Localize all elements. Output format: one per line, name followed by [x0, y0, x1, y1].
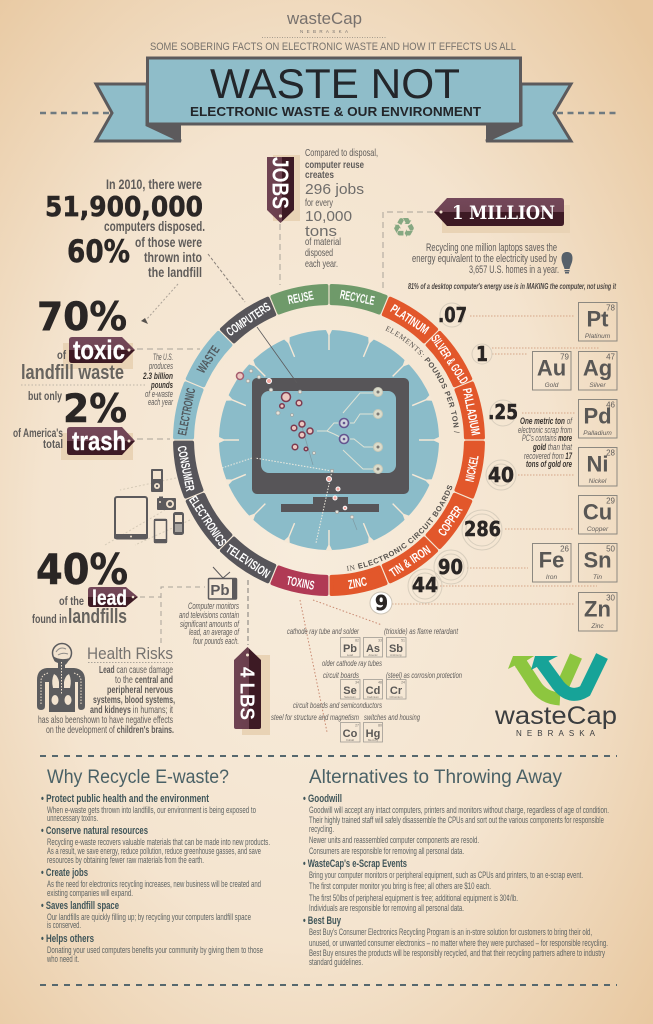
- segment: platinum: PLATINUM: [388, 302, 431, 337]
- logo: wasteCap Nebraska: [494, 656, 617, 738]
- element: gold: 79: [560, 352, 570, 362]
- subtitle: ELECTRONIC WASTE & OUR ENVIRONMENT: [190, 104, 481, 119]
- text: health risks: Lead can cause damage: [99, 664, 173, 676]
- segment: consumer: [173, 439, 202, 497]
- panel: alternatives to throwing away: Consumers are responsible for removing all personal data.: [309, 846, 464, 856]
- header: wasteCap logo and tagline: wasteCap: [286, 9, 362, 28]
- segment: electronic: [173, 383, 202, 441]
- small element boxes: toxins: 80: [378, 724, 382, 728]
- stat: 70% toxic landfill waste: 70%: [37, 295, 127, 340]
- stat: 70% toxic landfill waste: of: [57, 348, 67, 362]
- text: jobs created: tons: [305, 223, 337, 240]
- tag: 4 LBS: [234, 647, 270, 735]
- stat: 51,900,000 computers: In 2010, there were: [106, 177, 202, 192]
- text: jobs created: of material: [305, 236, 341, 248]
- text: monitors contain lead: [179, 601, 240, 647]
- element: silver: Ag: [583, 356, 612, 380]
- ring of labelled segments: [173, 284, 485, 596]
- segment: waste: [186, 332, 232, 388]
- text: recycling one million laptops: Recycling one million laptops saves the: [426, 242, 557, 254]
- element: tin: [578, 544, 617, 582]
- segment: zinc: [328, 567, 386, 596]
- segment: silver and gold: SILVER & GOLD: [428, 332, 471, 387]
- small element boxes: toxins: Chromium: [390, 695, 403, 699]
- callout: one metric ton: One metric ton of: [520, 416, 573, 427]
- segment: waste: WASTE: [194, 343, 223, 376]
- text: jobs created: Compared to disposal,: [305, 147, 378, 159]
- stat: 51,900,000 computers: 51,900,000: [45, 190, 203, 223]
- callout: one metric ton: PC's contains more: [522, 433, 572, 444]
- text: jobs created: 10,000: [305, 208, 352, 225]
- small element boxes: toxins: 24: [401, 680, 405, 684]
- small element boxes: toxins: 33: [378, 638, 382, 642]
- stat: 2% trash: of America's: [13, 426, 63, 440]
- note: 2.3 billion pounds: of e-waste: [145, 389, 173, 399]
- panel: why recycle e-waste: resources by obtaining fewer raw materials from the earth.: [47, 855, 204, 865]
- stat: 51,900,000 computers: the landfill: [148, 265, 202, 280]
- panel: why recycle e-waste: • Saves landfill space: [41, 900, 119, 912]
- text: monitors contain lead: significant amounts of: [180, 619, 240, 630]
- segment: copper: [426, 492, 472, 548]
- stat: 2% trash: 2%: [63, 387, 127, 432]
- panel: alternatives to throwing away: Newer units and reassembled computer components are resold.: [309, 835, 479, 845]
- text: jobs created: disposed: [305, 247, 333, 259]
- panel: why recycle e-waste: • Create jobs: [41, 867, 88, 879]
- element: iron: Iron: [546, 574, 557, 581]
- segment: television: TELEVISION: [223, 542, 273, 581]
- element: palladium: 46: [606, 400, 616, 410]
- segment: recycle: RECYCLE: [339, 288, 376, 308]
- circuit lines: [317, 393, 374, 469]
- header: wasteCap logo and tagline: [150, 9, 516, 53]
- element: copper: Cu: [583, 500, 612, 524]
- dotted and thin lines: [222, 327, 357, 543]
- text: jobs created: each year.: [305, 258, 338, 270]
- element: gold: [532, 352, 571, 390]
- element: nickel: Ni: [586, 452, 608, 476]
- pounds per ton numbers: 40: [488, 463, 514, 487]
- center graphic: monitor on gear: [218, 327, 440, 551]
- pounds per ton numbers: .07: [438, 303, 467, 327]
- segment: television: [221, 537, 277, 583]
- segment: tin and iron: [381, 537, 437, 583]
- toxin usage labels: switches and housing: [364, 712, 420, 722]
- stat: 2% trash: total: [43, 437, 63, 451]
- title text: WASTE NOT: [210, 60, 460, 107]
- element: palladium: Palladium: [583, 430, 612, 437]
- note: 2.3 billion pounds: 2.3 billion: [142, 371, 173, 381]
- small element boxes: toxins: [340, 638, 406, 742]
- segment: reuse: [272, 284, 330, 313]
- note: 2.3 billion pounds: pounds: [150, 380, 173, 390]
- small element boxes: toxins: Cr: [390, 685, 403, 697]
- panel: why recycle e-waste: existing companies will expand.: [47, 888, 133, 898]
- element: palladium: Pd: [583, 404, 612, 428]
- icon: TV with Pb: [208, 567, 237, 599]
- segment: consumer: CONSUMER: [174, 445, 197, 492]
- callout: one metric ton: recovered from 17: [524, 451, 572, 462]
- stat: 51,900,000 computers: thrown into: [144, 250, 202, 265]
- element: copper: [578, 496, 617, 534]
- stat: 70% toxic landfill waste: landfill waste: [21, 362, 124, 384]
- icon: light bulb: [562, 252, 572, 274]
- element: platinum: 78: [606, 304, 616, 312]
- text: recycling one million laptops: energy equivalent to the electricity used by: [412, 253, 557, 265]
- segment: toxins: TOXINS: [285, 574, 316, 593]
- element: nickel: 28: [606, 448, 616, 458]
- logo: wasteCap Nebraska: NEBRASKA: [516, 729, 596, 738]
- text: jobs created: 296 jobs: [305, 181, 364, 198]
- text: monitors contain lead: and televisions contain: [179, 610, 239, 621]
- logo: wasteCap Nebraska: wasteCap: [494, 702, 617, 730]
- element: nickel: Nickel: [589, 478, 607, 485]
- small element boxes: toxins: Se: [343, 685, 357, 697]
- panel: alternatives to throwing away: The first computer monitor you bring is free; all others are $10 each.: [309, 881, 491, 891]
- element: copper: Copper: [587, 526, 609, 533]
- curved label: elements pounds per ton: ELEMENTS: POUNDS PER TON /: [385, 326, 460, 433]
- pounds per ton numbers: .25: [488, 400, 518, 424]
- small element boxes: toxins: Selenium: [344, 695, 356, 699]
- tag: 4 LBS: 4 LBS: [236, 667, 258, 720]
- toxin usage labels: cathode ray tube and solder: [287, 626, 360, 636]
- element: gold: Gold: [545, 382, 559, 389]
- icon: smartphone: [154, 519, 167, 543]
- panel: why recycle e-waste: • Protect public health and the environment: [41, 793, 209, 805]
- stat: 70% toxic landfill waste: [21, 295, 135, 384]
- panel: alternatives to throwing away: Individuals are responsible for removing all personal data.: [309, 903, 464, 913]
- element: platinum: Pt: [586, 306, 609, 332]
- segment: nickel: [456, 439, 485, 497]
- note: 2.3 billion pounds: produces: [148, 361, 173, 371]
- small element boxes: toxins: 51: [401, 638, 405, 642]
- small element boxes: toxins: Arsenic: [368, 653, 378, 657]
- panel: why recycle e-waste: • Helps others: [41, 933, 94, 945]
- element: zinc: [578, 592, 617, 631]
- element: gold: Au: [537, 356, 566, 380]
- small element boxes: toxins: Cobalt: [346, 738, 354, 742]
- element: zinc: 30: [606, 594, 616, 602]
- text: recycling one million laptops: 3,657 U.S. homes in a year.: [469, 264, 559, 276]
- stat: 2% trash: but only: [28, 389, 62, 403]
- segment: zinc: ZINC: [347, 574, 368, 592]
- panel: why recycle e-waste: is conserved.: [47, 920, 81, 930]
- small element boxes: toxins: 82: [355, 638, 359, 642]
- panel: alternatives to throwing away: • Best Buy: [303, 915, 342, 927]
- panel: why recycle e-waste: As a result, we save energy, reduce pollution, reduce greenhouse gasses, and save: [47, 846, 261, 856]
- small element boxes: toxins: Pb: [343, 643, 357, 655]
- header: wasteCap logo and tagline: NEBRASKA: [300, 29, 348, 34]
- callout: one metric ton: gold than that: [532, 442, 572, 453]
- segment: computers: [221, 297, 277, 343]
- pounds per ton numbers: 9: [375, 591, 388, 615]
- element: zinc: Zn: [584, 596, 611, 622]
- text: health risks: has also beenshown to have negative effects: [38, 714, 173, 726]
- small element boxes: toxins: Sb: [389, 643, 403, 655]
- note: 2.3 billion pounds: each year: [148, 397, 174, 407]
- segment: tin and iron: TIN & IRON: [387, 543, 433, 580]
- stat: 40% lead: of the: [59, 596, 84, 608]
- element: platinum: Platinum: [585, 333, 611, 340]
- segment: computers: COMPUTERS: [224, 300, 273, 339]
- icon: TV with Pb: Pb: [210, 582, 230, 599]
- element: iron: 26: [560, 544, 570, 554]
- text: health risks: Health Risks: [87, 644, 173, 663]
- toxin usage labels: circuit boards: [323, 670, 360, 680]
- pink data nodes: [236, 372, 313, 451]
- small element boxes: toxins: Co: [343, 728, 358, 740]
- panel: alternatives to throwing away: • WasteCap's e-Scrap Events: [303, 858, 407, 870]
- pounds per ton numbers: 1: [476, 342, 488, 366]
- panel: why recycle e-waste: As the need for electronics recycling increases, new business will be created and: [47, 879, 261, 889]
- panel: alternatives to throwing away: The first 50lbs of peripheral equipment is free; additional equipment is 30¢/lb.: [309, 893, 518, 903]
- element: zinc: Zinc: [590, 623, 604, 630]
- icon: recycle: ♻: [392, 213, 416, 244]
- stat: 2% trash: [13, 387, 135, 460]
- small element boxes: toxins: 27: [355, 724, 359, 728]
- pounds per ton numbers: 90: [438, 555, 463, 579]
- icon: camera: [157, 496, 176, 510]
- toxin usage labels: circuit boards and semiconductors: [293, 700, 383, 710]
- number rings: [408, 303, 516, 603]
- element: tin: 50: [606, 544, 616, 554]
- toxin usage labels: (steel) as corrosion protection: [386, 670, 462, 680]
- segment: electronic: ELECTRONIC: [175, 387, 198, 437]
- stat: 40% lead: found in: [32, 614, 67, 626]
- element: iron: [532, 544, 571, 582]
- segment: nickel: NICKEL: [463, 454, 482, 483]
- panel: why recycle e-waste: • Conserve natural resources: [41, 825, 148, 837]
- connector lines: [21, 212, 433, 732]
- panel: why recycle e-waste: who need it.: [46, 954, 79, 964]
- stat: 40% lead: landfills: [68, 606, 127, 628]
- stat: 51,900,000 computers: computers disposed.: [104, 219, 205, 234]
- callout: one metric ton: electronic scrap from: [518, 425, 572, 436]
- panel: alternatives to throwing away: recycling.: [309, 824, 334, 834]
- segment: palladium: PALLADIUM: [460, 387, 483, 437]
- text: monitors contain lead: lead, an average of: [189, 627, 240, 638]
- heading: Why Recycle E-waste?: [47, 767, 229, 788]
- circuit nodes: [374, 388, 382, 474]
- text: jobs created: creates: [305, 169, 334, 181]
- logo mark: [508, 656, 602, 699]
- stat: 40% lead: 40%: [36, 545, 128, 594]
- note: 2.3 billion pounds: The U.S.: [153, 352, 173, 362]
- element: tin: Sn: [583, 548, 612, 572]
- section dividers: [40, 756, 617, 985]
- segment: copper: COPPER: [435, 504, 465, 539]
- stat: 51,900,000 computers: of those were: [135, 235, 202, 250]
- heading: Alternatives to Throwing Away: [309, 767, 562, 788]
- text: jobs created: computer reuse: [305, 159, 364, 171]
- small element boxes: toxins: 48: [378, 680, 382, 684]
- panel: alternatives to throwing away: standard guidelines.: [309, 957, 363, 967]
- toxin usage labels: (trioxide) as flame retardant: [384, 626, 458, 636]
- note: 2.3 billion pounds: [142, 352, 174, 407]
- callout: one metric ton: tons of gold ore: [526, 459, 572, 470]
- panel: why recycle e-waste: Our landfills are quickly filling up; by recycling your computers landfill space: [47, 912, 251, 922]
- pounds per ton numbers: 286: [464, 517, 501, 541]
- panel: why recycle e-waste: Recycling e-waste recovers valuable materials that can be made into new products.: [47, 837, 270, 847]
- small element boxes: toxins: Mercury: [368, 738, 379, 742]
- tag: trash: trash: [72, 426, 126, 456]
- small element boxes: toxins: 34: [355, 680, 359, 684]
- segment: electronics: [185, 491, 233, 549]
- header: wasteCap logo and tagline: SOME SOBERING FACTS ON ELECTRONIC WASTE AND HOW IT EFFECTS US ALL: [150, 41, 516, 53]
- text: jobs created: for every: [305, 197, 334, 209]
- pounds per ton numbers: 44: [412, 573, 438, 597]
- small element boxes: toxins: As: [366, 643, 380, 655]
- element: copper: 29: [606, 496, 616, 506]
- text: monitors contain lead: Computer monitors: [188, 601, 239, 612]
- panel: why recycle e-waste: When e-waste gets thrown into landfills, our environment is being exposed to: [47, 805, 256, 815]
- panel: alternatives to throwing away: [303, 767, 609, 967]
- text: recycling one million laptops: [408, 242, 617, 291]
- tag: 1 MILLION: [434, 198, 570, 233]
- panel: why recycle e-waste: Donating your used computers benefits your community by giving them to those: [47, 945, 263, 955]
- panel: why recycle e-waste: unnecessary toxins.: [47, 813, 98, 823]
- element: silver: 47: [606, 352, 616, 362]
- panel: why recycle e-waste: [41, 767, 270, 964]
- tag: JOBS: JOBS: [268, 157, 294, 209]
- callout: one metric ton: [518, 416, 573, 470]
- small element boxes: toxins: Cd: [366, 685, 380, 697]
- icons: consumer electronics: [114, 469, 184, 543]
- text: health risks: [38, 644, 175, 736]
- icon: tablet: [114, 497, 148, 539]
- toxin usage labels: older cathode ray tubes: [322, 658, 383, 668]
- small element boxes: toxins: Lead: [347, 653, 354, 657]
- segment: toxins: [272, 567, 330, 596]
- element: platinum: [578, 302, 617, 341]
- tag: 1 MILLION: 1 MILLION: [452, 202, 555, 224]
- small element boxes: toxins: Hg: [366, 728, 380, 740]
- stat: 51,900,000 computers: 60%: [67, 234, 130, 270]
- element: palladium: [578, 400, 617, 438]
- dotted leader lines to element boxes: [392, 316, 600, 604]
- segment: recycle: [328, 284, 386, 313]
- title ribbon: [40, 58, 617, 142]
- segment: silver and gold: [426, 331, 473, 388]
- pounds per ton numbers: [375, 303, 518, 615]
- tag: lead: lead: [92, 587, 127, 610]
- toxin usage labels: [271, 626, 462, 722]
- icon: human body: [37, 644, 85, 712]
- stat: 40% lead: [32, 545, 138, 628]
- text: monitors contain lead: four pounds each.: [193, 636, 239, 647]
- element: silver: [578, 352, 617, 390]
- small element boxes: toxins: Antimony: [390, 653, 402, 657]
- element: silver: Silver: [589, 382, 606, 389]
- toxin usage labels: steel for structure and magnetism: [271, 712, 359, 722]
- text: health risks: and kidneys in humans; it: [90, 704, 173, 716]
- icon: keypad phone: [173, 512, 184, 535]
- gear notches: [218, 329, 440, 551]
- tag: toxic: toxic: [73, 335, 125, 365]
- panel: alternatives to throwing away: • Goodwill: [303, 793, 342, 805]
- segment: reuse: REUSE: [287, 288, 315, 307]
- segment: platinum: [381, 297, 437, 343]
- element: iron: Fe: [539, 548, 564, 572]
- text: health risks: systems, blood systems,: [93, 694, 175, 706]
- segment: electronics: ELECTRONICS: [186, 494, 229, 549]
- stat: 51,900,000 computers: [45, 177, 205, 280]
- segment: palladium: [456, 383, 485, 441]
- small element boxes: toxins: Cadmium: [367, 695, 380, 699]
- text: health risks: on the development of children's brains.: [46, 724, 174, 736]
- icon: music player: [151, 469, 163, 492]
- text: jobs created: [305, 147, 378, 270]
- curved label: in electronic circuit boards: IN ELECTRONIC CIRCUIT BOARDS: [346, 485, 452, 571]
- element: nickel: [578, 448, 617, 486]
- text: health risks: to the central and: [115, 674, 173, 686]
- text: health risks: peripheral nervous: [107, 684, 173, 696]
- element: tin: Tin: [593, 574, 602, 581]
